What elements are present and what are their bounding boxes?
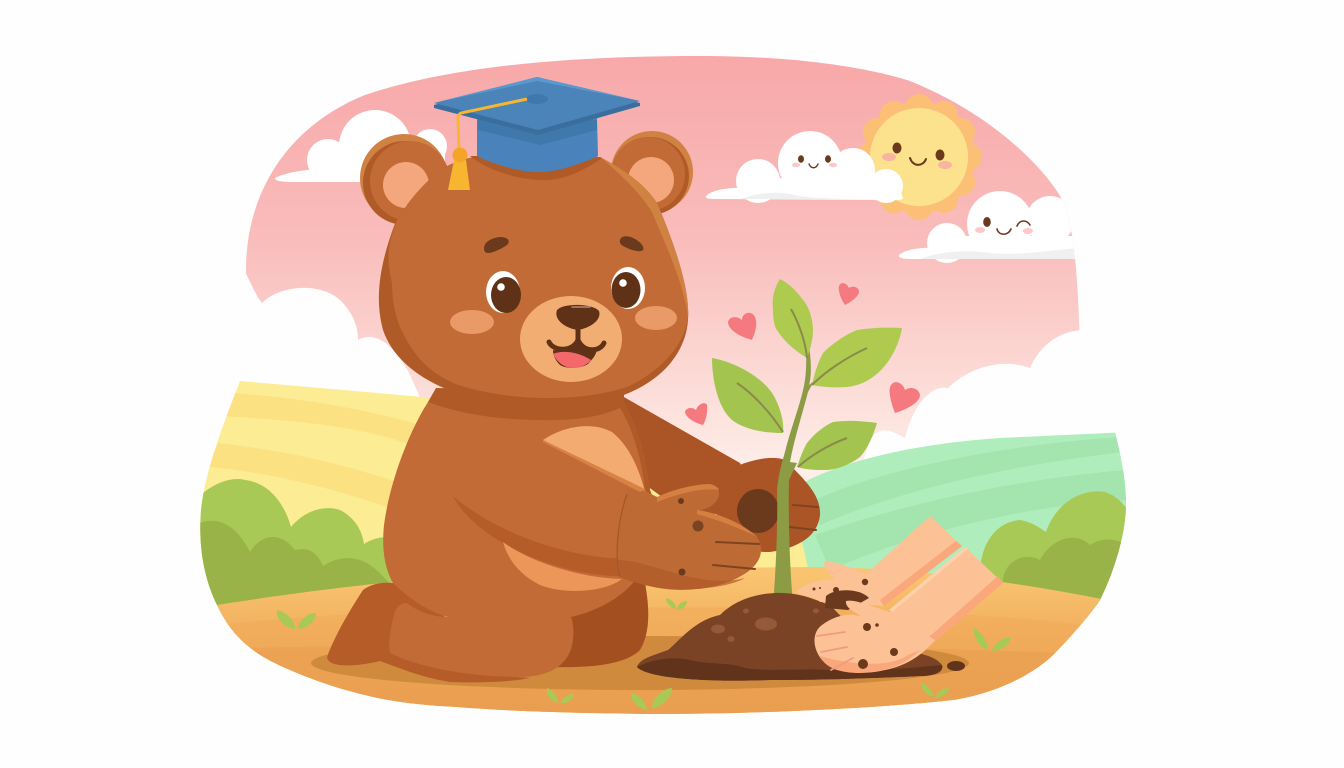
belly patch (503, 542, 622, 591)
upper right leaf (812, 328, 902, 387)
far arm seam (618, 400, 654, 500)
mouth (549, 330, 604, 350)
soil crumb (947, 661, 965, 671)
soil lump behind front hand (825, 590, 869, 610)
right bushes (980, 491, 1130, 610)
lower right leaf (797, 421, 877, 470)
yellow field (190, 378, 850, 620)
stem (773, 340, 814, 607)
near arm (480, 440, 657, 560)
arm shadow (453, 496, 655, 576)
smiling cloud (706, 131, 903, 203)
land (190, 378, 1130, 720)
graduation cap (434, 77, 640, 190)
ground (210, 567, 1130, 720)
brows (484, 237, 509, 253)
sun (856, 94, 982, 220)
top leaf (773, 279, 813, 358)
head (379, 156, 688, 407)
top-left cloud (275, 110, 447, 182)
back thigh (545, 560, 648, 667)
green field (790, 432, 1130, 620)
winking cloud (899, 191, 1080, 263)
front helper hand (814, 547, 1003, 673)
muzzle (520, 296, 622, 382)
background scene (190, 50, 1130, 720)
chest patch (543, 426, 645, 492)
rear foot (327, 583, 530, 682)
near hand (617, 484, 761, 590)
ground shadow (311, 636, 969, 690)
tassel (448, 99, 527, 190)
bear (327, 77, 820, 682)
hearts (685, 283, 920, 425)
sapling (712, 279, 902, 607)
right ear (611, 131, 693, 215)
neck shadow (428, 388, 624, 420)
left bushes (195, 479, 400, 615)
illustration: graduate bear planting a sapling (200, 56, 1126, 714)
sky (240, 50, 1090, 490)
sprouts (277, 598, 1011, 710)
far arm and hand (615, 392, 820, 552)
soil mound (637, 593, 965, 681)
horizon clouds (200, 262, 1130, 470)
left ear (360, 134, 450, 225)
cheeks (450, 310, 494, 334)
body (383, 400, 650, 677)
rear helper hand (796, 516, 962, 606)
nose (556, 305, 599, 330)
left leaf (712, 358, 783, 433)
eyes (486, 271, 520, 313)
